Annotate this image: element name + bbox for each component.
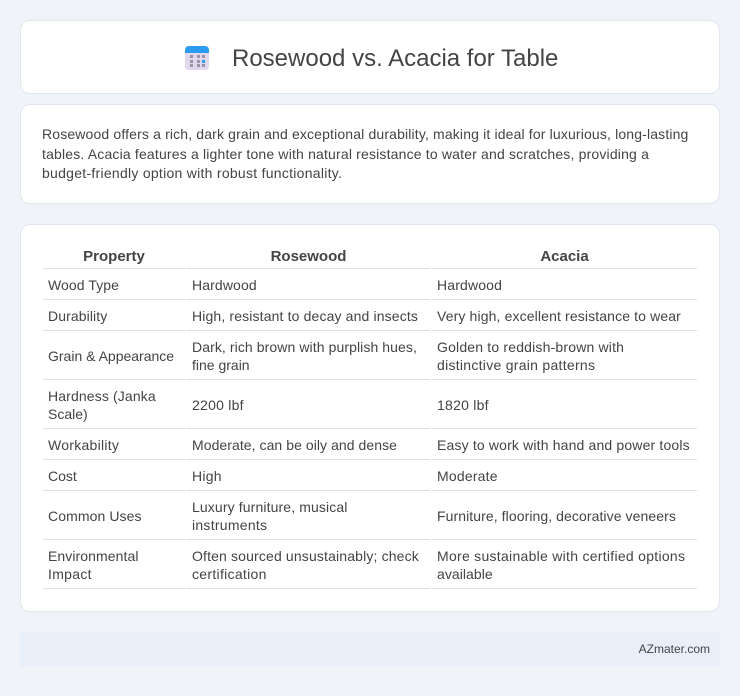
comparison table: distinctive grain patterns [437, 357, 595, 373]
comparison table: Hardwood [192, 277, 257, 293]
comparison table: Hardwood [437, 277, 502, 293]
footer credit: AZmater.com [639, 642, 710, 656]
comparison table: Furniture, flooring, decorative veneers [437, 508, 676, 524]
summary card [20, 104, 720, 204]
comparison table: High [192, 468, 222, 484]
comparison table: Often sourced unsustainably; check [192, 548, 419, 564]
comparison table: High, resistant to decay and insects [192, 308, 418, 324]
comparison table: Hardness (Janka [48, 388, 156, 404]
row: Common Uses [48, 499, 676, 533]
comparison table: Luxury furniture, musical [192, 499, 348, 515]
row: Wood Type [48, 277, 502, 293]
comparison table: Moderate, can be oily and dense [192, 437, 397, 453]
comparison table: 1820 lbf [437, 397, 489, 413]
comparison table: Common Uses [48, 508, 142, 524]
comparison table: Easy to work with hand and power tools [437, 437, 690, 453]
comparison table: certification [192, 566, 267, 582]
row: Cost [48, 468, 498, 484]
header: Acacia: Acacia [540, 248, 589, 265]
table card [20, 224, 720, 612]
title: Rosewood vs. Acacia for Table [232, 45, 558, 72]
comparison table: Scale) [48, 406, 88, 422]
comparison table: fine grain [192, 357, 250, 373]
comparison table: Workability [48, 437, 119, 453]
title card [20, 20, 720, 94]
comparison table: Very high, excellent resistance to wear [437, 308, 681, 324]
summary text: Rosewood offers a rich, dark grain and exceptional durability, making it ideal for luxurious, long-lasting [42, 126, 688, 142]
summary text: tables. Acacia features a lighter tone with natural resistance to water and scratches, providing a [42, 146, 649, 162]
summary text [42, 126, 688, 181]
comparison table: Dark, rich brown with purplish hues, [192, 339, 417, 355]
comparison table: Impact [48, 566, 92, 582]
comparison table: Cost [48, 468, 77, 484]
comparison table: available [437, 566, 493, 582]
comparison table: instruments [192, 517, 267, 533]
comparison table: Wood Type [48, 277, 119, 293]
row: Workability [48, 437, 690, 453]
row: Hardness [48, 388, 489, 422]
footer [20, 632, 720, 666]
comparison table: Moderate [437, 468, 498, 484]
row: Durability [48, 308, 681, 324]
comparison table: Environmental [48, 548, 139, 564]
header: Rosewood: Rosewood [271, 248, 346, 265]
row: Grain & Appearance [48, 339, 624, 373]
comparison table: Golden to reddish-brown with [437, 339, 624, 355]
comparison table: Durability [48, 308, 107, 324]
header: Property: Property [83, 248, 145, 265]
icon: calendar [185, 46, 209, 70]
comparison table: Grain & Appearance [48, 348, 174, 364]
comparison table: 2200 lbf [192, 397, 244, 413]
row: Environmental Impact [48, 548, 685, 582]
comparison table: More sustainable with certified options [437, 548, 685, 564]
summary text: budget-friendly option with robust functionality. [42, 165, 342, 181]
